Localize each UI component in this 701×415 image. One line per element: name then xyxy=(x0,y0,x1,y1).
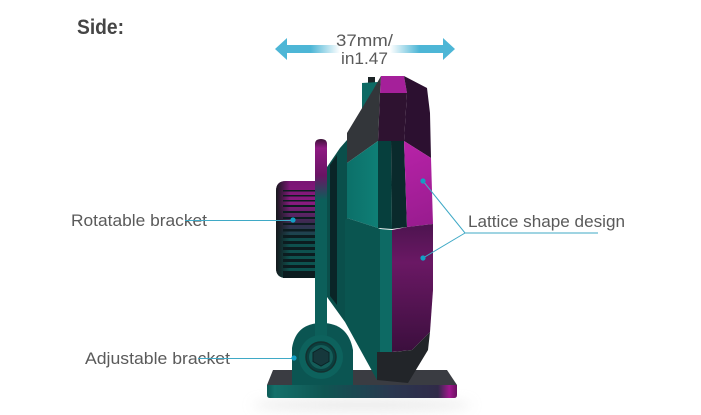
hinge bolt xyxy=(299,335,343,379)
dimension label: 37mm/ xyxy=(336,31,393,50)
callout: rotatable bracket: Rotatable bracket xyxy=(71,211,207,230)
rotatable knob xyxy=(276,181,316,278)
callout: lattice shape design xyxy=(420,178,625,261)
callout: adjustable bracket xyxy=(85,349,297,368)
callout: rotatable bracket xyxy=(71,211,296,230)
callout: lattice shape design: Lattice shape design xyxy=(468,212,625,231)
base shadow xyxy=(252,399,472,411)
dimension label xyxy=(336,31,393,68)
hinge bracket xyxy=(292,323,353,385)
support arm xyxy=(315,139,327,345)
dimension label: in1.47 xyxy=(341,49,388,68)
dimension arrow xyxy=(275,38,455,60)
title: Side: Side: xyxy=(77,16,124,39)
product: side view of phone holder xyxy=(252,76,472,411)
rear housing xyxy=(327,140,347,322)
phone clamp body xyxy=(345,76,433,383)
base plate xyxy=(267,370,457,398)
top clip xyxy=(362,77,378,116)
callout: adjustable bracket: Adjustable bracket xyxy=(85,349,230,368)
